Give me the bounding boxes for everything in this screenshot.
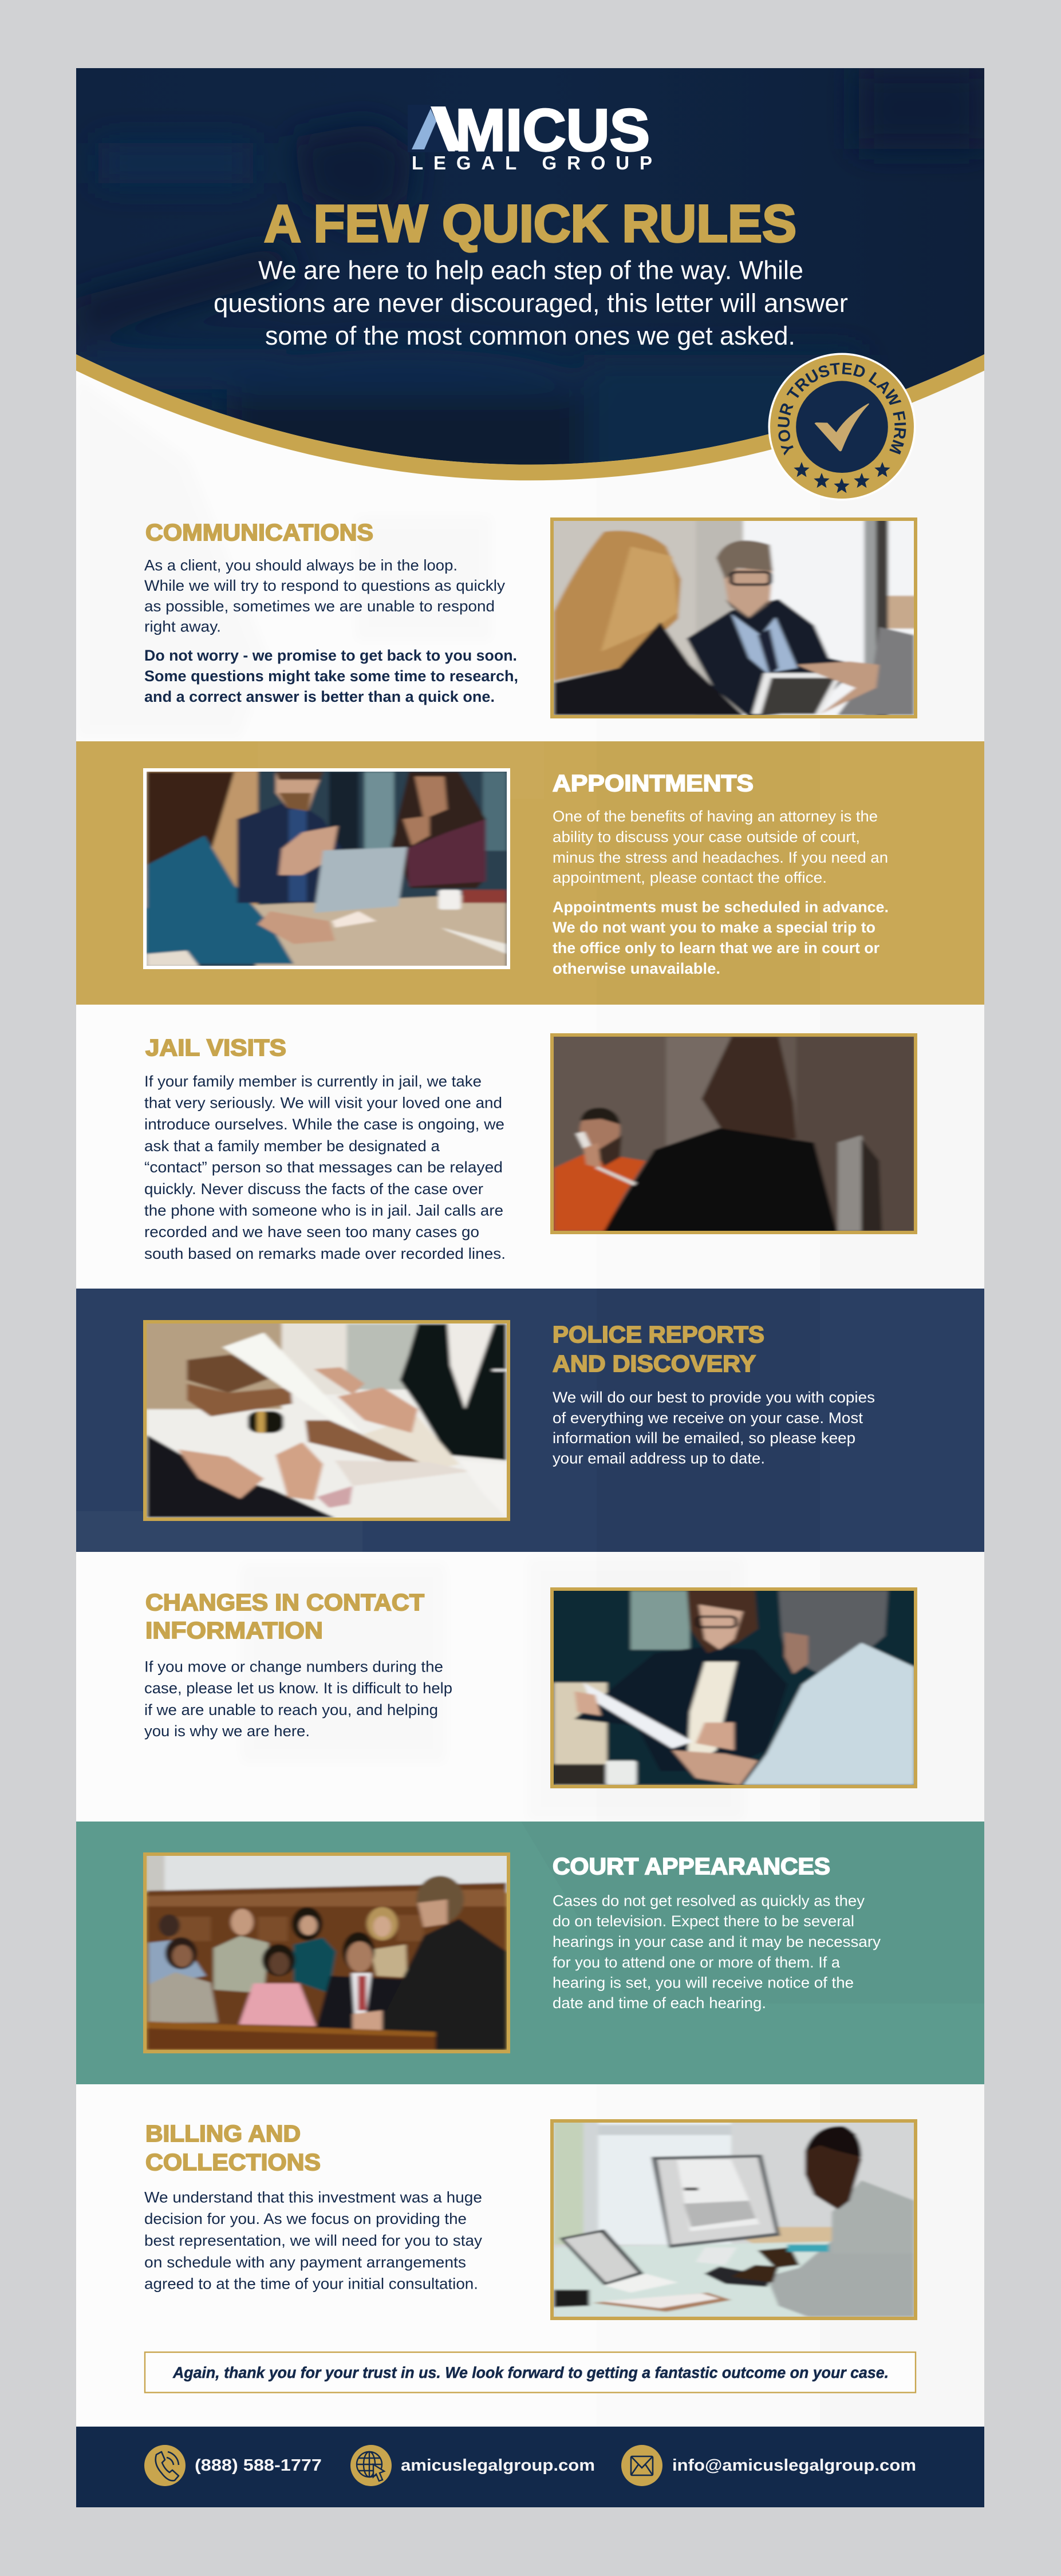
text: court appearances body	[553, 1893, 881, 2012]
heading: police reports and discovery	[553, 1321, 764, 1377]
icon: globe with cursor	[350, 2445, 392, 2486]
text: jail visits body: recorded and we have seen too many cases go	[144, 1223, 479, 1240]
text: appointments body	[553, 808, 888, 886]
icon: phone	[144, 2445, 186, 2486]
footer bar	[76, 2427, 984, 2507]
band: police reports navy	[76, 1289, 984, 1552]
text: email: info@amicuslegalgroup.com	[672, 2456, 916, 2475]
text: court appearances body: for you to attend one or more of them. If a	[553, 1954, 841, 1971]
panel: billing and collections	[144, 2120, 483, 2292]
band: court appearances green	[76, 1822, 984, 2084]
text: court appearances body: date and time of each hearing.	[553, 1994, 766, 2012]
text: jail visits body: ask that a family member be designated a	[144, 1137, 440, 1155]
heading: changes in contact information	[145, 1589, 424, 1643]
text: police reports body: your email address up to date.	[553, 1449, 765, 1467]
text: police reports body	[553, 1389, 875, 1467]
text: police reports body: of everything we receive on your case. Most	[553, 1409, 863, 1427]
intro text: questions are never discouraged, this letter will answer	[214, 289, 848, 318]
text: appointments notice: the office only to learn that we are in court or	[553, 939, 879, 957]
text: phone number: (888) 588-1777	[195, 2456, 322, 2475]
text: billing body	[144, 2189, 483, 2292]
photo: man reviewing invoice at desk	[542, 2116, 926, 2324]
text: police reports body: information will be emailed, so please keep	[553, 1429, 855, 1447]
text: billing body: We understand that this investment was a huge	[144, 2189, 482, 2206]
badge: your trusted law firm	[768, 353, 914, 499]
heading: police reports and discovery: POLICE REPORTS	[553, 1321, 764, 1348]
photo: legal documents on desk	[143, 1320, 512, 1523]
panel: changes in contact information	[144, 1589, 452, 1740]
callout: thank you	[145, 2352, 916, 2393]
text: communications body: As a client, you should always be in the loop.	[144, 556, 457, 574]
heading: police reports and discovery: AND DISCOVERY	[553, 1350, 756, 1377]
text: court appearances body: Cases do not get resolved as quickly as they	[553, 1893, 865, 1910]
text: jail visits body: the phone with someone who is in jail. Jail calls are	[144, 1202, 503, 1219]
text: changes body: If you move or change numbers during the	[144, 1658, 443, 1675]
text: billing body: on schedule with any payment arrangements	[144, 2254, 466, 2271]
text: changes body: you is why we are here.	[144, 1722, 310, 1740]
panel: jail visits	[144, 1034, 506, 1262]
text: court appearances body: hearing is set, you will receive notice of the	[553, 1974, 854, 1991]
band: appointments gold	[76, 741, 984, 1005]
photo: jury in courtroom	[143, 1851, 512, 2053]
text: communications body: right away.	[144, 618, 221, 635]
heading: court appearances: COURT APPEARANCES	[553, 1853, 830, 1879]
intro text: We are here to help each step of the way. While	[258, 255, 803, 285]
photo: jail visit phone call	[542, 1029, 926, 1238]
heading: appointments: APPOINTMENTS	[553, 770, 754, 796]
text: communications promise: Some questions might take some time to research,	[144, 667, 518, 685]
logo: LEGAL GROUP	[412, 152, 652, 173]
photo: team discussion around a laptop	[143, 767, 512, 970]
text: court appearances body: do on television. Expect there to be several	[553, 1913, 854, 1930]
text: billing body: best representation, we will need for you to stay	[144, 2232, 483, 2249]
text: jail visits body: If your family member is currently in jail, we take	[144, 1073, 482, 1090]
title: A FEW QUICK RULES	[264, 195, 796, 253]
photo: attorney and client meeting	[542, 517, 926, 721]
text: appointments notice: otherwise unavailable.	[553, 960, 720, 977]
text: billing body: decision for you. As we focus on providing the	[144, 2210, 467, 2227]
text: jail visits body: south based on remarks made over recorded lines.	[144, 1245, 506, 1262]
text: changes body: if we are unable to reach you, and helping	[144, 1701, 438, 1718]
heading: billing and collections	[145, 2120, 321, 2175]
text: website: amicuslegalgroup.com	[401, 2456, 595, 2475]
callout: thank you: Again, thank you for your trust in us. We look forward to getting a fantastic outcome on your case.	[172, 2364, 889, 2381]
text: communications promise: Do not worry - we promise to get back to you soon.	[144, 647, 517, 664]
text: jail visits body: “contact” person so that messages can be relayed	[144, 1159, 503, 1176]
text: jail visits body: that very seriously. We will visit your loved one and	[144, 1095, 502, 1112]
panel: communications	[144, 519, 518, 705]
heading: billing and collections: BILLING AND	[145, 2120, 301, 2147]
text: jail visits body	[144, 1073, 506, 1262]
badge: your trusted law firm: YOUR TRUSTED LAW FIRM	[778, 363, 906, 456]
logo: AMICUS	[412, 97, 650, 164]
text: appointments body: One of the benefits of having an attorney is the	[553, 808, 878, 825]
heading: billing and collections: COLLECTIONS	[145, 2149, 321, 2175]
text: communications promise	[144, 647, 518, 705]
heading: jail visits: JAIL VISITS	[145, 1034, 286, 1061]
text: communications body: as possible, sometimes we are unable to respond	[144, 598, 495, 615]
text: appointments body: appointment, please contact the office.	[553, 869, 827, 886]
paper panel with marble texture	[76, 355, 984, 2427]
header band with gavel photo	[76, 68, 984, 465]
photo: woman reviewing a document with client	[542, 1584, 926, 1792]
heading: changes in contact information: INFORMATION	[145, 1617, 323, 1643]
text: appointments body: minus the stress and headaches. If you need an	[553, 849, 888, 866]
intro text: some of the most common ones we get asked.	[265, 321, 795, 350]
text: appointments notice: Appointments must be scheduled in advance.	[553, 899, 889, 916]
text: communications body: While we will try to respond to questions as quickly	[144, 577, 506, 594]
heading: communications: COMMUNICATIONS	[145, 519, 373, 546]
icon: envelope	[621, 2445, 662, 2486]
text: billing body: agreed to at the time of your initial consultation.	[144, 2275, 478, 2292]
text: police reports body: We will do our best to provide you with copies	[553, 1389, 875, 1406]
text: court appearances body: hearings in your case and it may be necessary	[553, 1933, 881, 1950]
heading: changes in contact information: CHANGES IN CONTACT	[145, 1589, 424, 1615]
text: appointments notice	[553, 899, 889, 977]
text: jail visits body: introduce ourselves. While the case is ongoing, we	[144, 1116, 504, 1133]
text: communications promise: and a correct answer is better than a quick one.	[144, 688, 495, 705]
header gold curved ribbon	[76, 354, 984, 480]
text: changes body	[144, 1658, 452, 1740]
text: changes body: case, please let us know. It is difficult to help	[144, 1680, 452, 1697]
text: appointments body: ability to discuss your case outside of court,	[553, 828, 860, 846]
text: appointments notice: We do not want you to make a special trip to	[553, 919, 875, 936]
text: jail visits body: quickly. Never discuss the facts of the case over	[144, 1180, 483, 1198]
text: communications body	[144, 556, 506, 635]
intro text	[214, 255, 848, 350]
